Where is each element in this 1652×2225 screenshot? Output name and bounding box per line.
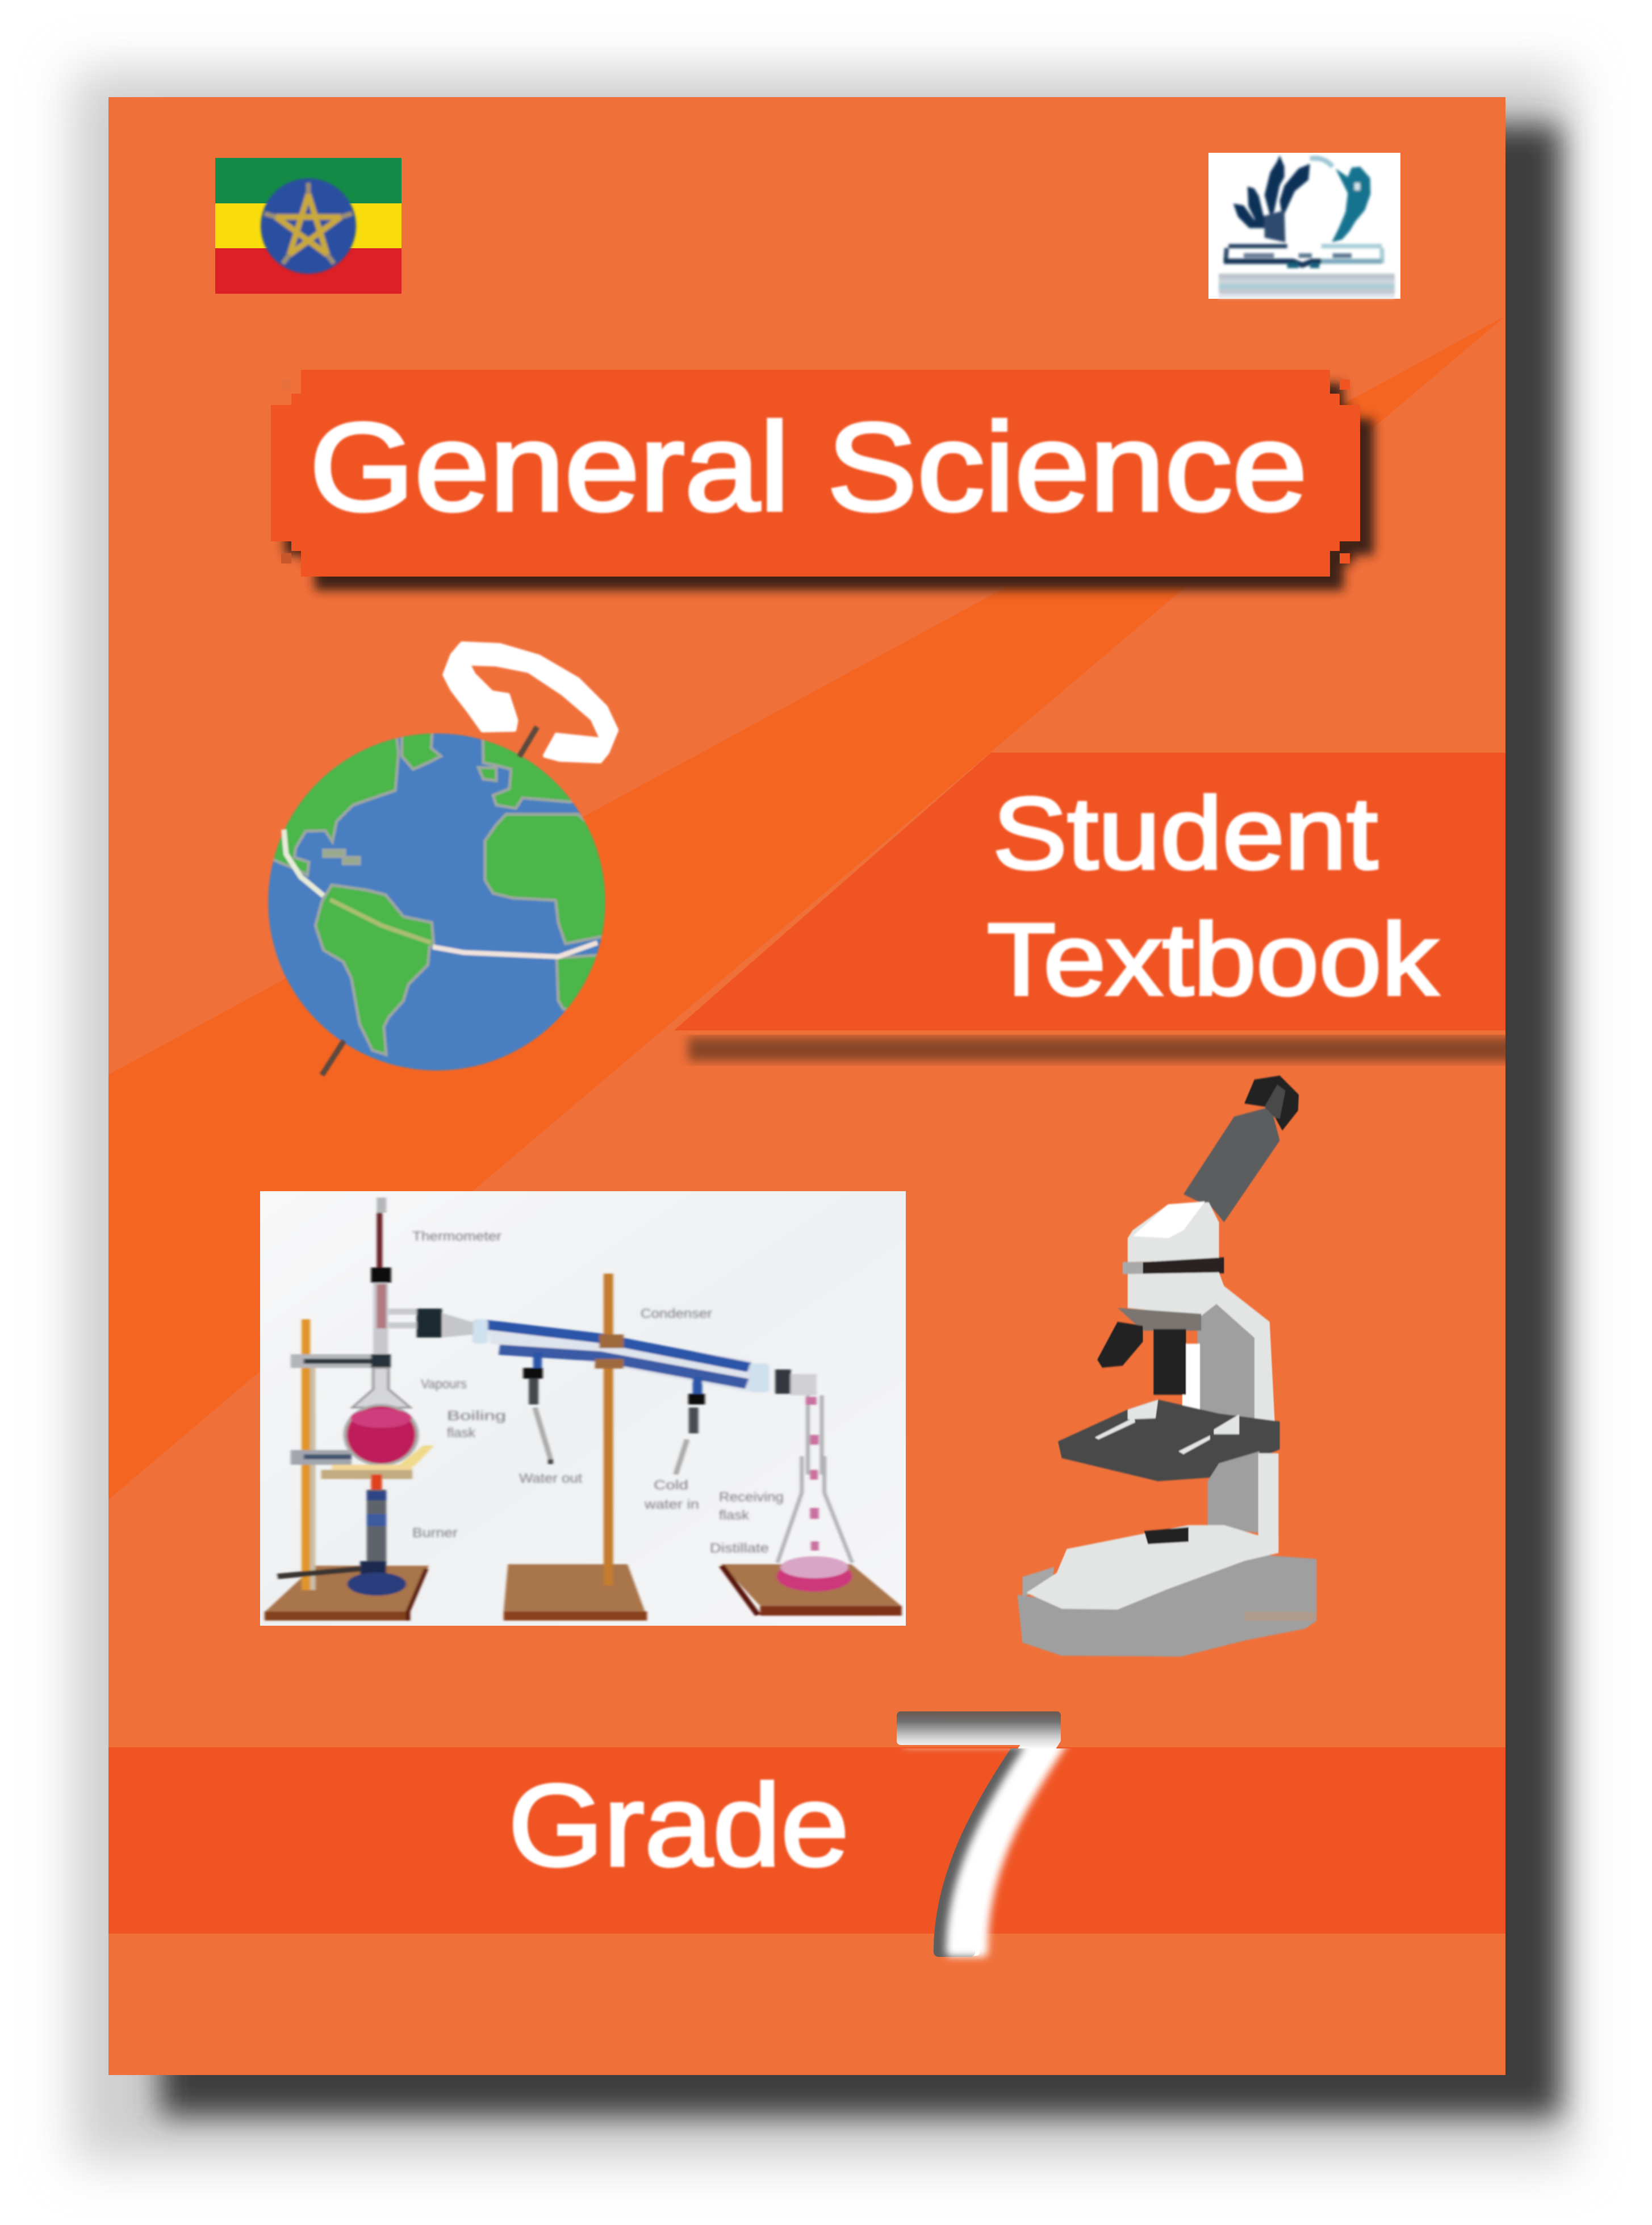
apparatus labels: flask	[447, 1425, 476, 1440]
tripod and burner	[278, 1446, 434, 1596]
base	[1018, 1554, 1316, 1656]
flag emblem	[261, 178, 356, 274]
apparatus labels: Distillate	[710, 1541, 769, 1555]
apparatus labels: Condenser	[641, 1306, 712, 1321]
left stand	[265, 1319, 429, 1621]
diagonal orange band	[108, 316, 1505, 1500]
equator ring	[284, 829, 324, 896]
Ethiopian flag	[215, 158, 402, 294]
student textbook banner: Textbook	[987, 903, 1438, 1017]
title banner	[271, 370, 1374, 590]
water out hose	[533, 1352, 542, 1368]
apparatus labels	[412, 1229, 784, 1555]
apparatus labels: Receiving	[719, 1489, 784, 1504]
condenser	[388, 1309, 817, 1475]
numeral 7: 7	[883, 1641, 1074, 2025]
apparatus labels: water in	[644, 1497, 699, 1512]
cover panel	[108, 97, 1505, 2075]
rotation arrow	[445, 644, 616, 761]
cold water hose	[693, 1377, 702, 1394]
globe with rotation arrow	[262, 644, 627, 1075]
objectives	[1118, 1308, 1201, 1330]
stage	[1058, 1400, 1280, 1481]
continents	[273, 732, 607, 1058]
apparatus labels: Cold	[654, 1477, 688, 1492]
institution logo	[1208, 153, 1400, 299]
grade bar	[108, 1711, 1505, 1963]
numeral 7: 7	[877, 1641, 1068, 2025]
student textbook banner	[674, 753, 1545, 1061]
receiving flask	[721, 1395, 902, 1615]
middle stand	[504, 1274, 647, 1621]
apparatus labels: Thermometer	[412, 1229, 501, 1243]
apparatus labels: Water out	[519, 1471, 583, 1485]
microscope arm	[1197, 1301, 1257, 1421]
microscope head	[1128, 1203, 1219, 1262]
grade text: Grade	[508, 1760, 849, 1890]
title text: General Science	[310, 397, 1307, 537]
globe ocean	[268, 733, 605, 1071]
distillation apparatus picture	[260, 1191, 906, 1626]
eyepiece tube	[1183, 1107, 1280, 1222]
numeral 7: 7	[890, 1641, 1081, 2025]
apparatus labels: flask	[719, 1508, 750, 1522]
apparatus labels: Burner	[412, 1525, 458, 1540]
boiling flask and thermometer	[345, 1197, 417, 1465]
apparatus labels: Vapours	[421, 1376, 467, 1391]
lower arm	[1207, 1451, 1261, 1533]
banner text: Student	[993, 777, 1378, 891]
apparatus labels: Boiling	[447, 1408, 506, 1423]
microscope	[1018, 1075, 1316, 1656]
axis	[322, 727, 537, 1075]
